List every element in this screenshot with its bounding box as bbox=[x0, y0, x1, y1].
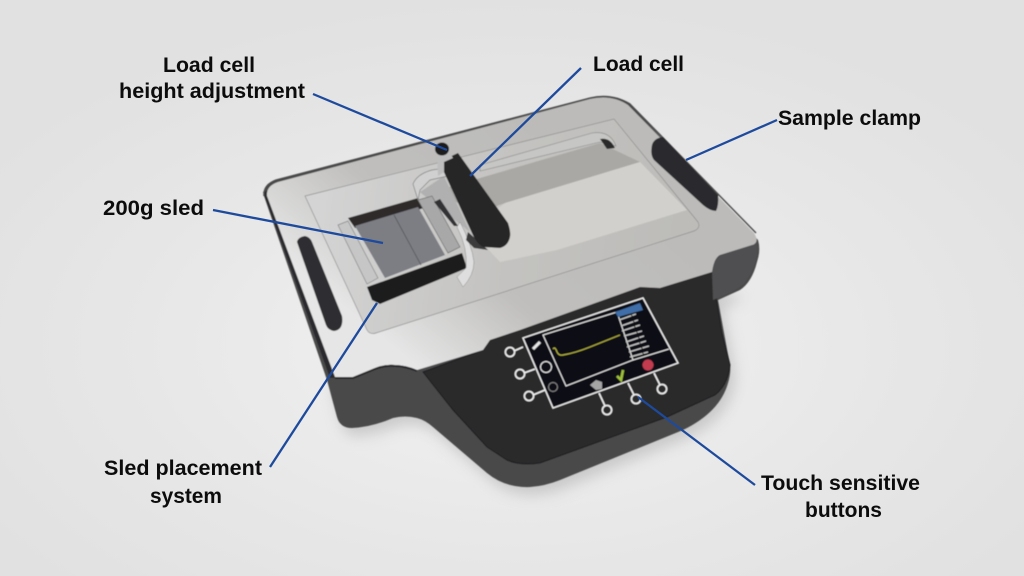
black front panel bbox=[423, 272, 730, 464]
label: touch sensitive buttons: Touch sensitive bbox=[761, 472, 920, 495]
sled bbox=[338, 176, 474, 304]
left strip bbox=[297, 236, 342, 331]
arm ground shadow bbox=[466, 232, 488, 250]
sound icon bbox=[548, 382, 558, 392]
wrench icon bbox=[533, 342, 540, 349]
left rail bbox=[338, 221, 378, 284]
height knob bbox=[435, 142, 449, 156]
base body bbox=[264, 96, 759, 487]
dial icon bbox=[540, 362, 552, 372]
device bbox=[263, 96, 759, 487]
back arrow bbox=[590, 380, 602, 390]
labels bbox=[103, 53, 921, 522]
light band bbox=[470, 162, 687, 262]
grey channel area bbox=[432, 143, 640, 212]
touch screen bbox=[505, 298, 678, 415]
menu highlight bbox=[615, 303, 643, 317]
slot rim bbox=[480, 133, 616, 171]
corner side bbox=[712, 243, 758, 300]
label: sled placement system: system bbox=[150, 485, 222, 508]
left edge trim bbox=[263, 190, 338, 378]
label: sample clamp: Sample clamp bbox=[778, 107, 921, 130]
leader lines bbox=[213, 68, 777, 485]
tick bbox=[617, 370, 623, 380]
leader: load cell bbox=[470, 68, 581, 176]
load cell arm bbox=[413, 142, 510, 250]
screen display bbox=[543, 312, 633, 386]
buttons bbox=[505, 347, 667, 415]
leader: placement bbox=[270, 303, 377, 467]
leader: sled bbox=[213, 210, 383, 243]
sled front bbox=[367, 253, 467, 304]
side divider bbox=[633, 349, 669, 360]
graph trace bbox=[553, 335, 620, 355]
arm interior bbox=[420, 176, 470, 232]
top outline bbox=[264, 96, 756, 233]
sample clamp bbox=[651, 137, 718, 211]
silver top bbox=[267, 97, 757, 377]
label: load cell height adjustment: height adjustment bbox=[119, 80, 305, 103]
mounting plate bbox=[305, 119, 699, 334]
arm interior shadow bbox=[434, 199, 458, 226]
arm body bbox=[443, 153, 510, 248]
sled black rear bbox=[348, 198, 424, 228]
label: touch sensitive buttons: buttons bbox=[805, 499, 882, 522]
hinge arm bbox=[457, 222, 474, 287]
silver lip shadow bbox=[335, 366, 417, 378]
adjustment post bbox=[437, 153, 453, 176]
label: sled placement system: Sled placement bbox=[104, 457, 262, 480]
label: load cell: Load cell bbox=[593, 53, 684, 76]
arm surround bbox=[413, 168, 448, 200]
leader: height adjustment bbox=[313, 94, 447, 150]
sled top bbox=[355, 207, 445, 278]
right rail bbox=[418, 196, 460, 253]
slot hole bbox=[600, 139, 615, 149]
cancel bbox=[642, 360, 654, 370]
menu lines bbox=[619, 314, 649, 357]
screen frame bbox=[523, 298, 678, 408]
label: load cell height adjustment: Load cell bbox=[163, 54, 255, 77]
device shadow bbox=[332, 288, 745, 495]
label: 200g sled: 200g sled bbox=[103, 197, 204, 220]
leader: sample clamp bbox=[686, 120, 777, 160]
sled divider bbox=[394, 215, 421, 265]
leader: buttons bbox=[638, 397, 755, 485]
